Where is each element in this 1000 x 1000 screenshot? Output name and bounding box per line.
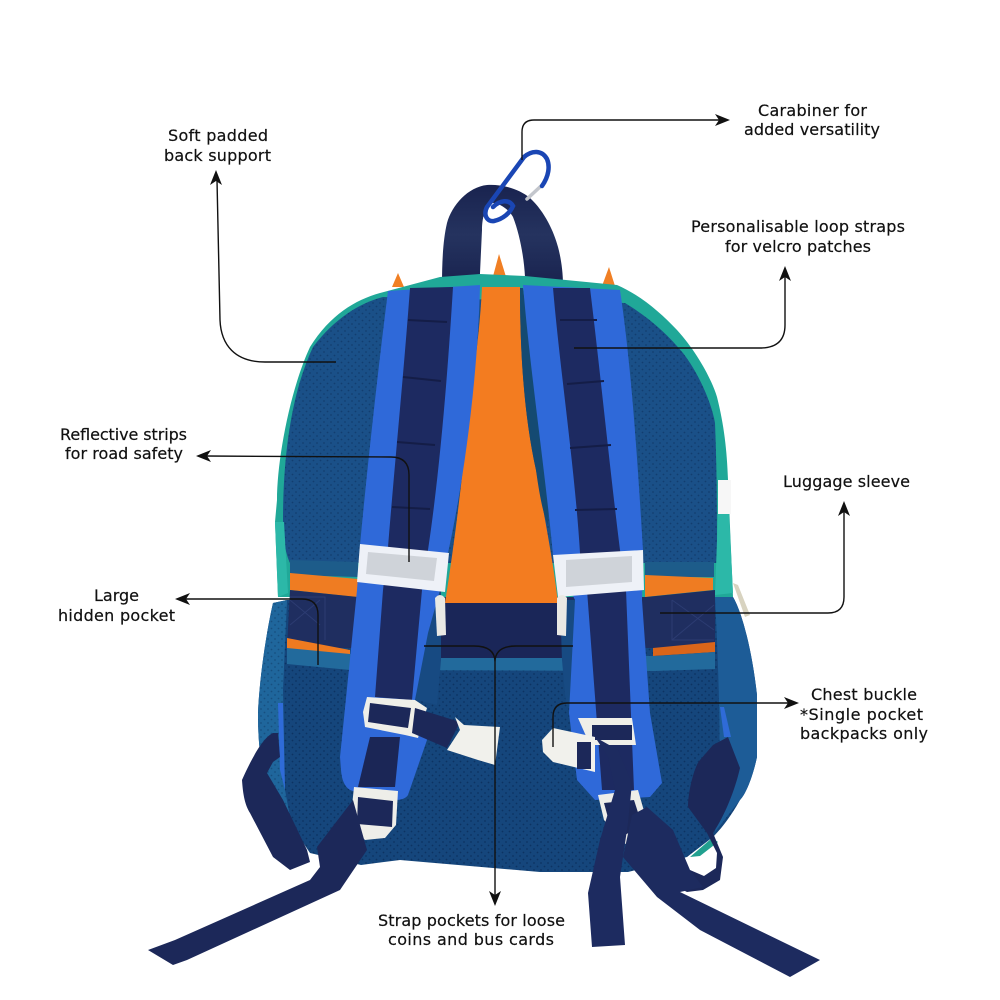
backpack illustration bbox=[148, 152, 820, 977]
left shoulder strap bbox=[340, 285, 480, 800]
centre navy panel bbox=[440, 603, 562, 658]
icon: orange spikes bbox=[392, 254, 615, 287]
chest buckle slot bbox=[577, 742, 591, 769]
beige tag bbox=[733, 583, 750, 617]
callout: personalisable loop straps: for velcro patches bbox=[725, 237, 871, 256]
callout: chest buckle bbox=[553, 685, 928, 747]
callout: carabiner bbox=[522, 101, 880, 160]
white luggage trim bbox=[718, 480, 731, 514]
right lower strap bbox=[623, 807, 820, 977]
callout: chest buckle: backpacks only bbox=[800, 724, 928, 743]
right narrow strap bbox=[588, 737, 632, 947]
strap stitch lines bbox=[392, 320, 447, 509]
callout: personalisable loop straps: Personalisable loop straps bbox=[691, 217, 905, 236]
callout: strap pockets: Strap pockets for loose bbox=[378, 911, 565, 930]
navy pocket band bbox=[287, 590, 715, 648]
callout: reflective strips: for road safety bbox=[65, 444, 183, 463]
right side panel bbox=[715, 597, 757, 832]
blue pocket trim bbox=[287, 648, 715, 671]
callout: carabiner: added versatility bbox=[744, 120, 880, 139]
reflective strip bbox=[357, 544, 449, 592]
right lower slider bbox=[598, 790, 648, 844]
left side panel bbox=[258, 600, 290, 817]
side blue strips bbox=[278, 703, 285, 790]
callout: soft padded back support: Soft padded bbox=[168, 126, 268, 145]
dark zip panels bbox=[416, 590, 441, 705]
callout: carabiner: Carabiner for bbox=[758, 101, 867, 120]
right adjuster buckle bbox=[578, 718, 636, 745]
callout: strap pockets: coins and bus cards bbox=[388, 930, 554, 949]
chest buckle male bbox=[542, 728, 595, 772]
left chest strap bbox=[412, 708, 460, 748]
icon: carabiner bbox=[485, 152, 549, 221]
zippers bbox=[435, 595, 567, 636]
callout: reflective strips bbox=[60, 425, 409, 562]
callout: luggage sleeve bbox=[660, 472, 910, 613]
left long strap bbox=[148, 800, 367, 965]
right shoulder strap bbox=[523, 285, 662, 800]
callout: soft padded back support: back support bbox=[164, 146, 271, 165]
callout: soft padded back support bbox=[164, 126, 336, 362]
callout: chest buckle: Chest buckle bbox=[811, 685, 917, 704]
callout: large hidden pocket bbox=[58, 586, 318, 665]
callout: reflective strips: Reflective strips bbox=[60, 425, 187, 444]
top carry handle bbox=[442, 185, 563, 285]
left loop strap bbox=[242, 733, 310, 870]
seam band upper bbox=[290, 560, 714, 577]
lower webbing bbox=[358, 737, 400, 787]
callout: strap pockets bbox=[378, 646, 573, 949]
left adjuster buckle bbox=[363, 697, 427, 738]
orange upper bands bbox=[290, 573, 713, 597]
teal side patches bbox=[275, 522, 288, 597]
callout: luggage sleeve: Luggage sleeve bbox=[783, 472, 910, 491]
right loop strap bbox=[673, 737, 740, 892]
callout: large hidden pocket: hidden pocket bbox=[58, 606, 175, 625]
callout: personalisable loop straps bbox=[574, 217, 905, 348]
left lower slider bbox=[350, 787, 398, 840]
teal lower accent bbox=[690, 838, 718, 857]
strap stitch lines bbox=[560, 320, 617, 510]
reflective strip bbox=[553, 550, 644, 597]
lower body mesh bbox=[258, 597, 757, 872]
orange centre panel bbox=[445, 287, 558, 603]
callout: chest buckle: *Single pocket bbox=[800, 705, 923, 724]
orange lower bands bbox=[287, 638, 350, 655]
pocket stitching: X patches bbox=[290, 597, 714, 640]
teal upper shell bbox=[275, 274, 733, 597]
mesh back panel bbox=[283, 297, 717, 563]
callout: large hidden pocket: Large bbox=[94, 586, 139, 605]
chest buckle female bbox=[447, 717, 500, 765]
dark mesh sliver bbox=[520, 288, 550, 525]
